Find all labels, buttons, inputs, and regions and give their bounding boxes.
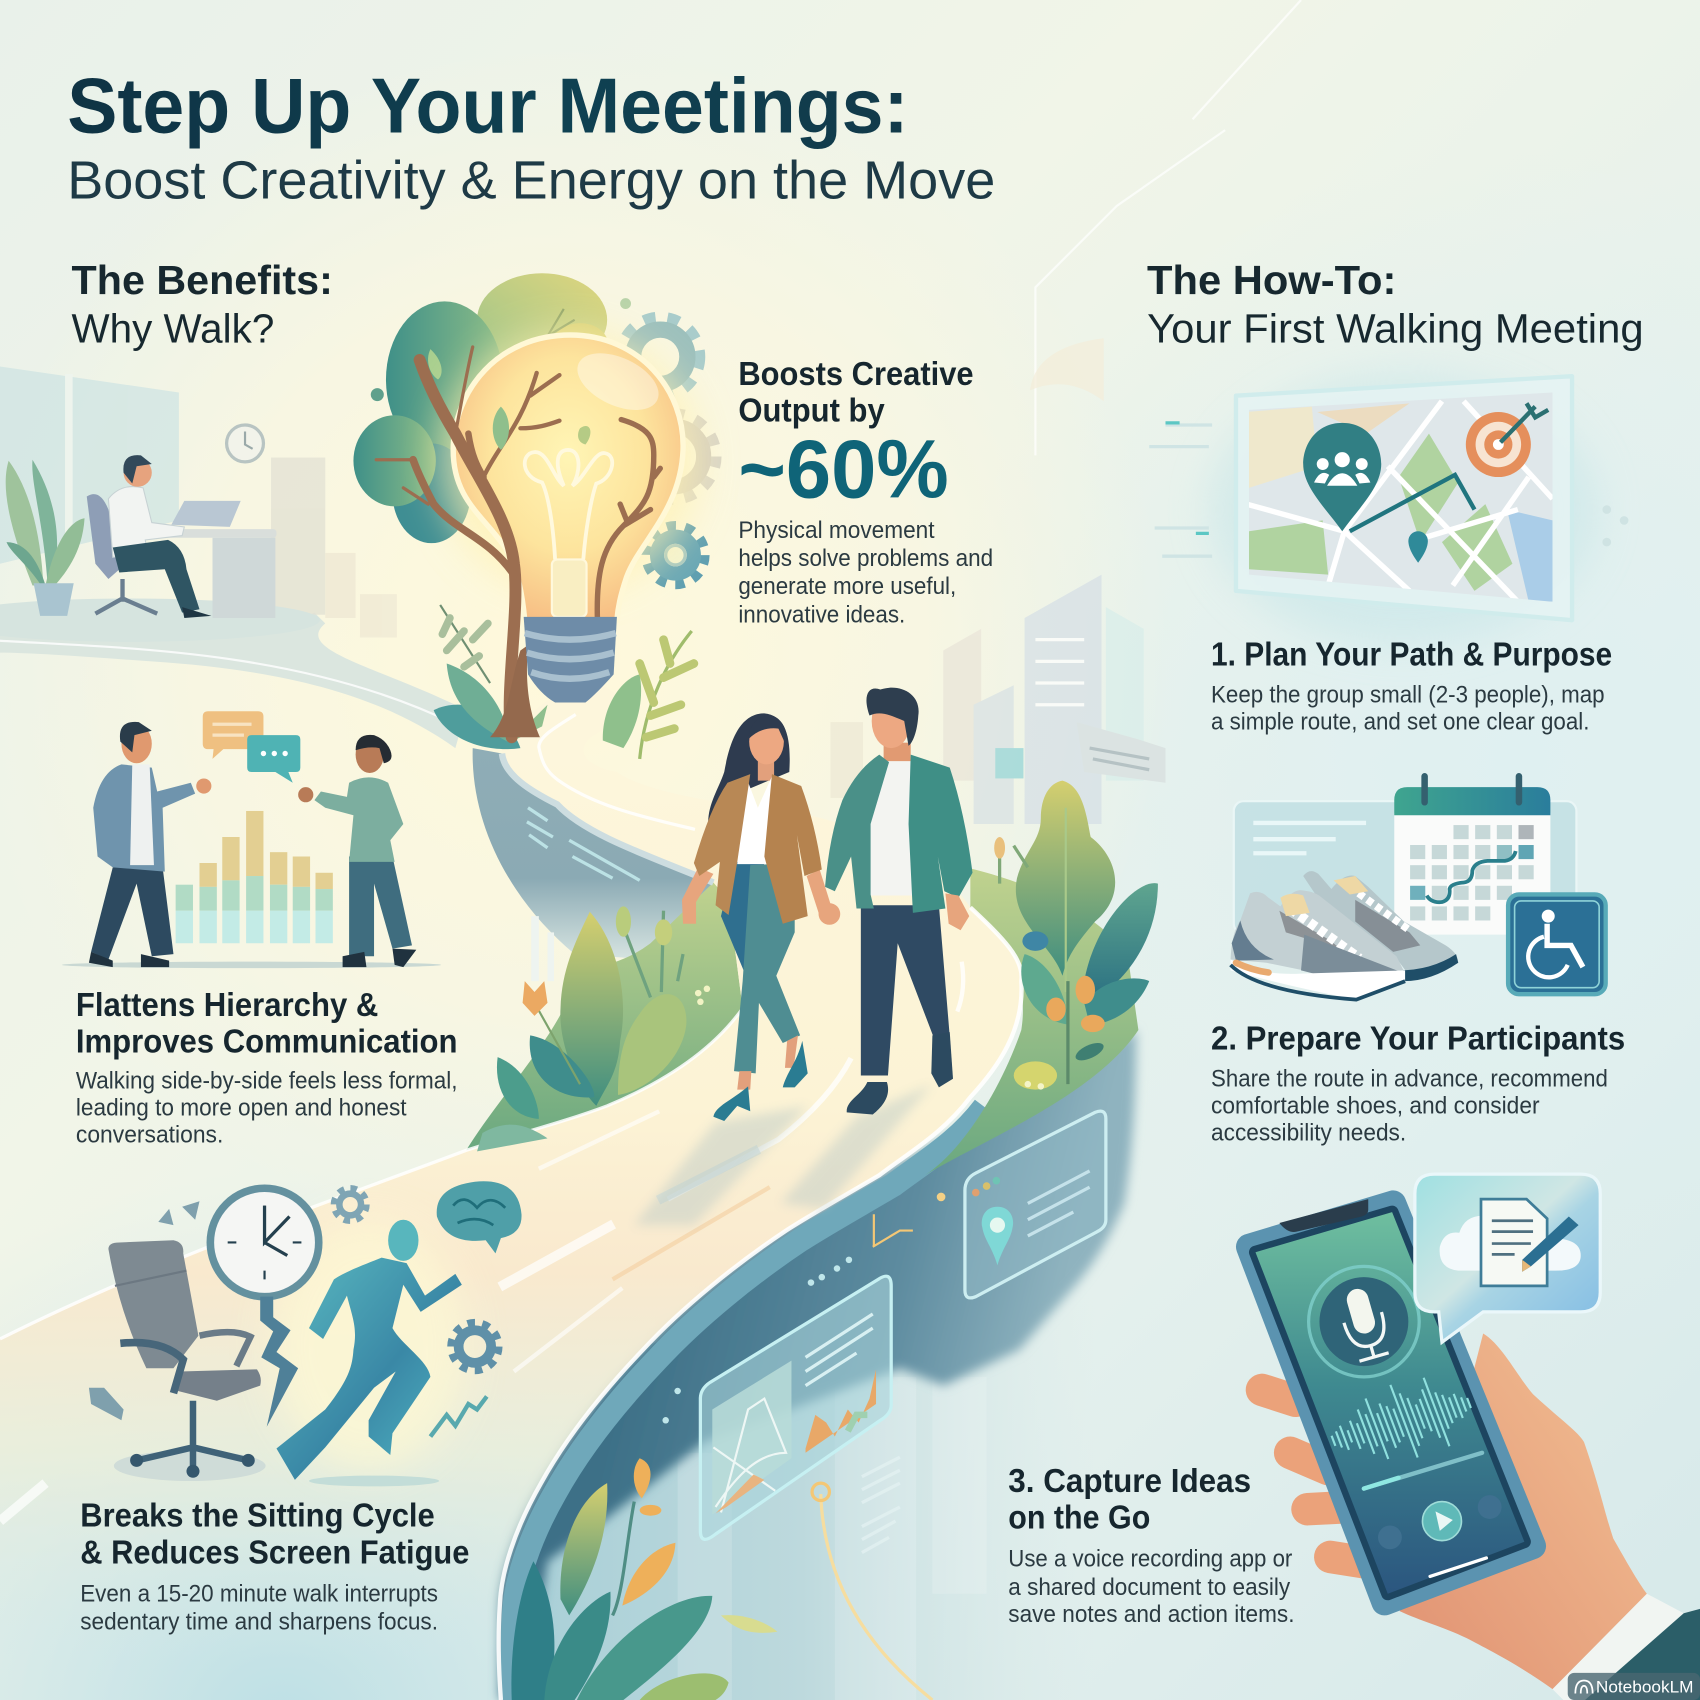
notch: [1279, 1199, 1368, 1232]
tree trunk: [376, 347, 660, 737]
text block: step 2: Share the route in advance, recommend: [1211, 1065, 1608, 1092]
fingers: [1262, 1390, 1371, 1563]
illustration: phone in hand: [1249, 1174, 1700, 1700]
text block: step 3: 3. Capture Ideas: [1008, 1463, 1251, 1500]
ground line: [62, 962, 441, 968]
text block: creative output: generate more useful,: [738, 573, 956, 600]
illustration: break the sitting cycle: [89, 1181, 522, 1486]
accessibility icon: [1508, 894, 1606, 994]
heading: benefits: Why Walk?: [72, 306, 274, 352]
illustration: desk worker office: [0, 366, 397, 642]
road sign: [1077, 722, 1165, 783]
document: [1481, 1199, 1547, 1286]
palm: [1400, 1334, 1647, 1689]
text block: breaks sitting cycle: & Reduces Screen Fatigue: [80, 1534, 469, 1571]
text block: creative output: Boosts Creative: [738, 356, 974, 393]
glass panel: [1234, 801, 1576, 933]
group pin: [1303, 423, 1381, 531]
brain icon: [437, 1181, 522, 1253]
running figure: [276, 1220, 462, 1486]
shards: [89, 1201, 199, 1420]
subtitle: Boost Creativity & Energy on the Move: [67, 150, 995, 210]
route line: [1350, 475, 1474, 531]
winding road surface: [0, 686, 1022, 1700]
lane markings: [539, 714, 695, 829]
data chart panel: [700, 1276, 891, 1539]
text block: step 3: a shared document to easily: [1008, 1574, 1291, 1601]
plants below bulb: [434, 605, 694, 759]
heading: benefits: The Benefits:: [72, 257, 333, 303]
walking couple: [682, 688, 973, 1121]
desk: [141, 529, 276, 618]
people shadows: [634, 1084, 932, 1225]
office skyline: [271, 458, 397, 638]
spark zigzag: [430, 1396, 487, 1437]
glowing circuit line: [812, 1483, 932, 1700]
illustration: shoes and calendar: [1231, 776, 1606, 1000]
clock: [210, 1188, 319, 1297]
upper road wall: [473, 748, 729, 981]
tech wall and road: [0, 686, 1138, 1700]
orange flowers: [1046, 976, 1105, 1032]
text block: flattens hierarchy: Walking side-by-side feels less formal,: [76, 1068, 458, 1095]
heading: how-to: The How-To:: [1147, 257, 1396, 303]
text block: step 3: [1008, 1463, 1295, 1628]
text block: breaks sitting cycle: Breaks the Sitting Cycle: [80, 1498, 435, 1535]
woman speaking: [298, 735, 416, 967]
bulb screw base: [524, 617, 617, 703]
plants beside road: [434, 605, 1158, 1700]
suit sleeve: [1585, 1609, 1700, 1700]
floor: [0, 598, 320, 642]
back shoe: [1303, 871, 1458, 981]
text block: breaks sitting cycle: Even a 15-20 minute walk interrupts: [80, 1580, 438, 1607]
grassy ground left: [466, 883, 743, 1150]
chat bubble orange: [203, 711, 263, 759]
phone body: [1249, 1199, 1533, 1602]
heading: benefits: [72, 257, 333, 352]
text block: breaks sitting cycle: [80, 1498, 469, 1636]
text block: step 3: save notes and action items.: [1008, 1601, 1295, 1628]
text block: step 1: [1211, 637, 1612, 736]
title: Step Up Your Meetings:: [67, 61, 909, 149]
text block: flattens hierarchy: conversations.: [76, 1122, 223, 1149]
text block: flattens hierarchy: Flattens Hierarchy &: [76, 987, 378, 1024]
gears behind bulb: [621, 318, 716, 584]
road edges: [0, 1008, 743, 1339]
text block: flattens hierarchy: Improves Communication: [76, 1024, 458, 1061]
pillars: [678, 1377, 987, 1700]
bulb glow: [439, 331, 699, 591]
dark wall band: [500, 1030, 1136, 1700]
desk worker: [87, 455, 241, 618]
stat: 60 percent: ~60%: [738, 424, 949, 516]
front shoe: [1231, 890, 1405, 1000]
target icon: [1466, 403, 1548, 477]
shirt cuff: [1553, 1594, 1684, 1700]
skyline behind road: [830, 338, 1144, 824]
equalizer bars: [176, 811, 333, 943]
play button: [1378, 1495, 1502, 1549]
text block: creative output: innovative ideas.: [738, 601, 905, 628]
cloud: [1440, 1216, 1581, 1271]
right tree: [1016, 781, 1158, 1084]
text block: step 3: Use a voice recording app or: [1008, 1546, 1292, 1573]
illustration: lightbulb tree: [353, 273, 716, 737]
waveform: [1332, 1378, 1471, 1459]
man: [819, 688, 973, 1115]
man speaking: [89, 722, 211, 967]
pale lower wall: [500, 1182, 1128, 1700]
text block: step 2: comfortable shoes, and consider: [1211, 1092, 1540, 1119]
text block: step 1: 1. Plan Your Path & Purpose: [1211, 637, 1612, 674]
grassy bank right: [925, 868, 1138, 1175]
text block: step 1: a simple route, and set one clear goal.: [1211, 709, 1589, 736]
text block: step 1: Keep the group small (2-3 people), map: [1211, 682, 1605, 709]
left ground plant: [477, 906, 710, 1151]
text block: step 2: accessibility needs.: [1211, 1120, 1406, 1147]
bulb glass: [453, 335, 683, 620]
text block: flattens hierarchy: [76, 987, 458, 1149]
wall clock: [227, 425, 263, 462]
potted plant: [6, 460, 85, 616]
tree crowns: [353, 273, 631, 543]
gears: [334, 1188, 499, 1370]
text block: creative output: [738, 356, 993, 628]
progress bar: [1364, 1453, 1482, 1489]
woman: [682, 713, 833, 1121]
text block: flattens hierarchy: leading to more open and honest: [76, 1095, 407, 1122]
mic button: [1309, 1266, 1419, 1377]
NotebookLM badge: [1568, 1673, 1700, 1700]
notes speech bubble: [1415, 1174, 1600, 1342]
small pin: [1408, 531, 1428, 563]
text block: breaks sitting cycle: sedentary time and sharpens focus.: [80, 1609, 438, 1636]
text block: creative output: Physical movement: [738, 517, 935, 544]
secondary left road: [0, 613, 466, 748]
NotebookLM badge: NotebookLM: [1596, 1677, 1693, 1696]
text block: step 2: [1211, 1020, 1625, 1147]
pen: [1522, 1216, 1579, 1272]
data streaks: [1149, 423, 1212, 556]
map pin panel: [965, 1111, 1106, 1298]
text block: step 2: 2. Prepare Your Participants: [1211, 1020, 1625, 1057]
text block: creative output: helps solve problems and: [738, 545, 993, 572]
office chair: [108, 1240, 266, 1481]
text block: step 3: on the Go: [1008, 1500, 1150, 1537]
illustration: route map: [1149, 374, 1628, 645]
heading: how-to: Your First Walking Meeting: [1147, 306, 1644, 352]
text block: creative output: Output by: [738, 393, 885, 430]
lightning crack: [260, 1297, 298, 1427]
chat bubble teal: [247, 735, 300, 783]
calendar: [1394, 776, 1550, 935]
heading: how-to: [1147, 257, 1644, 352]
illustration: conversation: [62, 711, 441, 968]
filament: [525, 450, 612, 559]
light band under road edge: [513, 1107, 984, 1700]
bottom plant: [511, 1458, 777, 1700]
office windows: [0, 366, 179, 564]
title: [67, 61, 995, 210]
